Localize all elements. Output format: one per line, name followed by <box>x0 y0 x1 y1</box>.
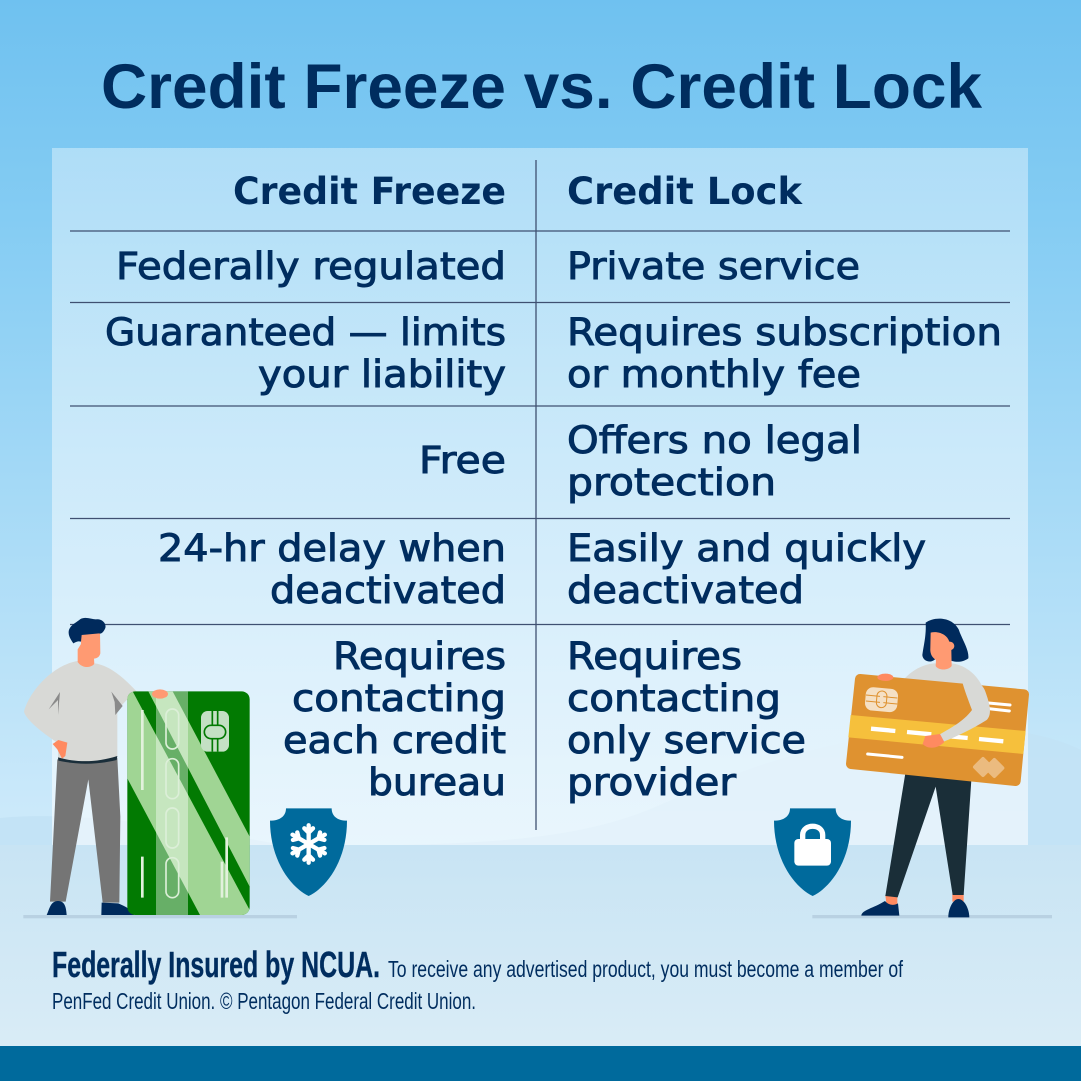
row 2: Credit Freeze <box>105 311 506 396</box>
footer: disclaimer: Federally Insured by NCUA. <box>52 944 380 985</box>
column heading: Credit Freeze: Credit Freeze <box>233 170 506 213</box>
card logo <box>972 756 1005 779</box>
row 5: Credit Lock: provider <box>567 761 737 804</box>
row 3: Credit Lock <box>567 419 862 504</box>
row 5: Credit Freeze: Requires <box>333 635 506 678</box>
row 1: Credit Lock: Private service <box>567 245 860 288</box>
man: sweater <box>24 661 138 762</box>
woman: hand on card <box>923 734 944 748</box>
row 5: Credit Lock: contacting <box>567 677 781 720</box>
row 5: Credit Freeze: each credit <box>283 719 506 762</box>
card number dashes <box>871 729 1003 741</box>
illustration: woman with orange card <box>812 619 1052 918</box>
man: neck and face <box>78 633 100 667</box>
man: hair <box>69 618 106 643</box>
card outlines <box>166 709 179 898</box>
row 5: Credit Lock: only service <box>567 719 806 762</box>
panel: comparison table background <box>52 148 1028 845</box>
row 3: Credit Lock: Offers no legal <box>567 419 862 462</box>
row 5: Credit Freeze: bureau <box>368 761 506 804</box>
woman: face and neck <box>930 632 954 669</box>
man: sweater folds <box>49 692 123 715</box>
row 3: Credit Lock: protection <box>567 461 776 504</box>
man: shoes <box>47 901 134 915</box>
footer: disclaimer: To receive any advertised product, you must become a member of <box>388 956 903 982</box>
ground shadow <box>812 915 1052 918</box>
bottom band <box>0 1046 1081 1081</box>
row 4: Credit Lock: deactivated <box>567 569 804 612</box>
green credit card <box>127 691 250 915</box>
snowflake <box>290 825 327 863</box>
footer: disclaimer: PenFed Credit Union. © Pentagon Federal Credit Union. <box>52 988 476 1014</box>
row 2: Credit Lock: or monthly fee <box>567 353 861 396</box>
icon: padlock shield <box>774 808 851 896</box>
woman: ankles <box>885 893 964 906</box>
man: belt <box>58 756 117 764</box>
table dividers <box>70 160 1010 830</box>
woman: shoes <box>861 899 969 917</box>
card chip <box>201 711 229 752</box>
column heading: Credit Lock: Credit Lock <box>567 170 803 213</box>
row 2: Credit Lock: Requires subscription <box>567 311 1002 354</box>
row 4: Credit Freeze <box>158 527 506 612</box>
woman: sweater top <box>903 663 985 693</box>
woman: trousers <box>885 773 971 897</box>
row 2: Credit Freeze: your liability <box>258 353 506 396</box>
illustration: man with green card <box>23 618 297 918</box>
woman: fingers on top of card <box>877 674 893 681</box>
icon: snowflake shield <box>270 808 347 896</box>
ground shadow <box>23 915 297 918</box>
row 1: Credit Freeze: Federally regulated <box>116 245 506 288</box>
padlock <box>794 826 831 866</box>
man: hand on card <box>152 689 168 699</box>
row 5: Credit Lock: Requires <box>567 635 742 678</box>
card lines <box>868 703 1010 757</box>
row 4: Credit Lock <box>567 527 926 612</box>
man: hand on hip <box>53 740 67 759</box>
row 3: Credit Freeze: Free <box>419 439 506 482</box>
row 5: Credit Freeze: contacting <box>292 677 506 720</box>
card chip <box>864 687 899 713</box>
orange credit card <box>848 679 1026 781</box>
row 2: Credit Freeze: Guaranteed — limits <box>105 311 506 354</box>
row 5: Credit Lock <box>567 635 806 804</box>
row 4: Credit Freeze: 24-hr delay when <box>158 527 506 570</box>
footer: disclaimer <box>52 944 903 1014</box>
row 2: Credit Lock <box>567 311 1002 396</box>
card lines <box>142 710 227 898</box>
title: Credit Freeze vs. Credit Lock <box>101 52 983 122</box>
background hills <box>0 729 1081 1046</box>
foreground ground <box>0 845 1081 1046</box>
card stripe <box>848 715 1026 754</box>
row 4: Credit Freeze: deactivated <box>270 569 506 612</box>
woman: hair back <box>922 619 968 662</box>
row 5: Credit Freeze <box>283 635 506 804</box>
woman: arm <box>939 681 990 742</box>
row 4: Credit Lock: Easily and quickly <box>567 527 926 570</box>
man: trousers <box>50 758 120 903</box>
